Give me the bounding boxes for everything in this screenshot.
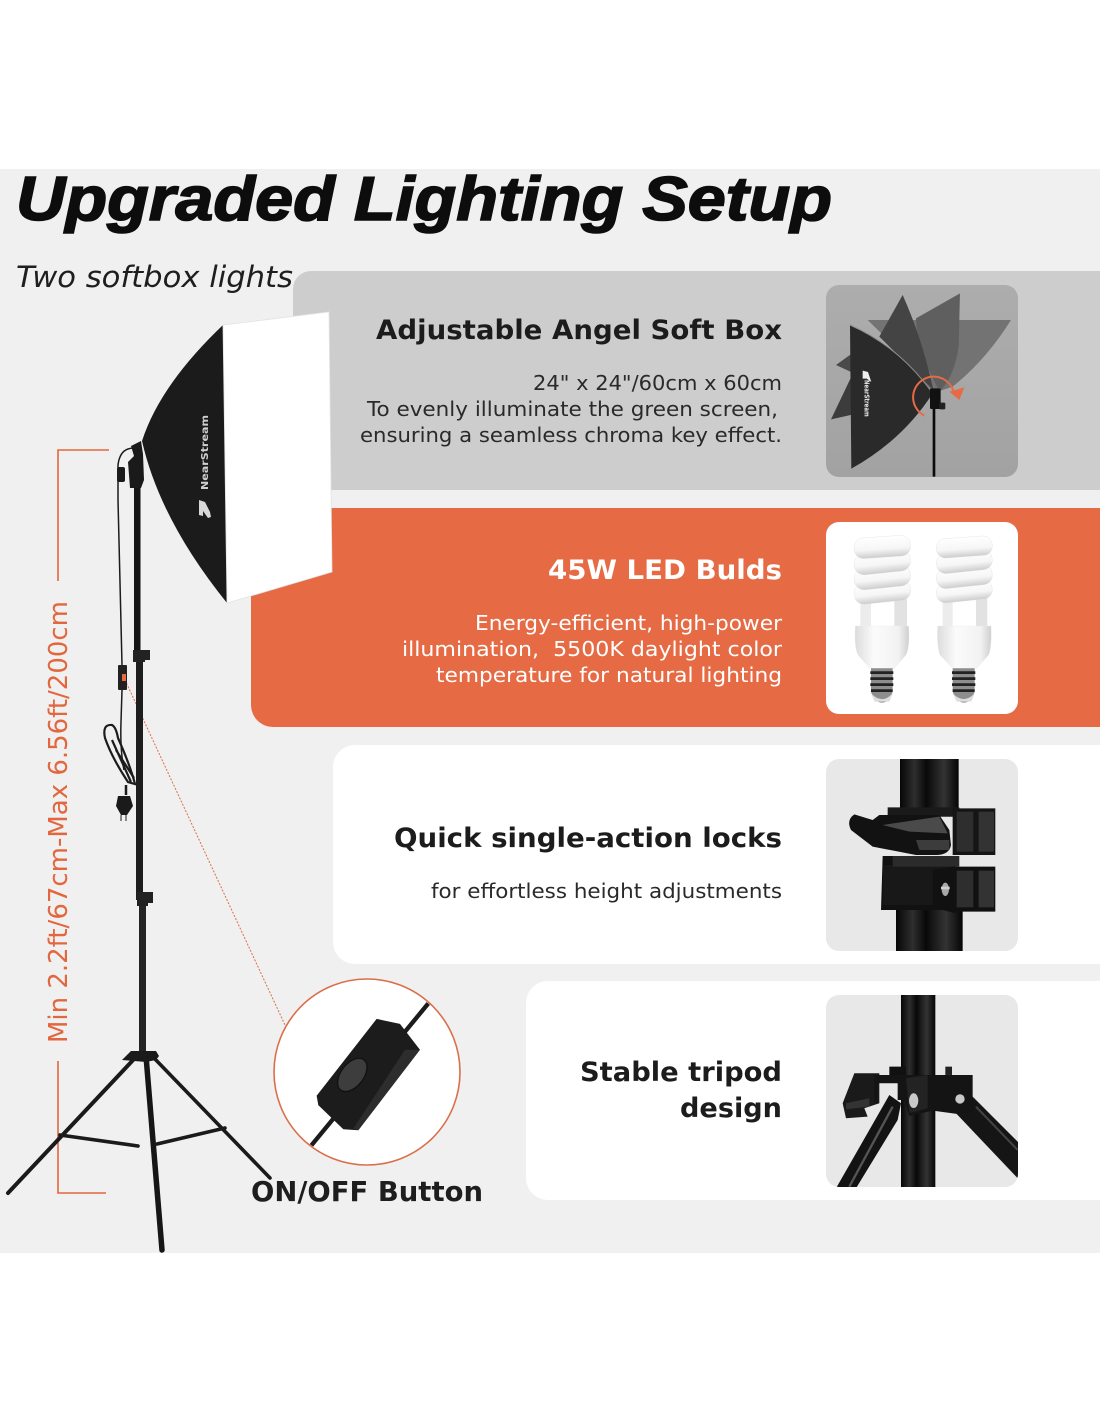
text block: bulb description bbox=[402, 611, 783, 687]
switch caption: ON/OFF Button bbox=[251, 1175, 483, 1208]
soft box bbox=[142, 312, 332, 603]
text block: soft box description: 24" x 24"/60cm x 60cm bbox=[533, 371, 782, 395]
icon: inline rocker switch bbox=[310, 1003, 428, 1147]
panel: LED bulbs bbox=[251, 508, 1100, 727]
callout: on/off switch bbox=[251, 979, 483, 1208]
heading: stable tripod: design bbox=[680, 1093, 782, 1124]
power cord and switch bbox=[104, 448, 135, 821]
icon: rotating soft box photo bbox=[826, 285, 1018, 477]
height dimension bracket bbox=[58, 450, 109, 1193]
mast bbox=[117, 441, 153, 1055]
panel: quick locks bbox=[333, 745, 1100, 964]
text block: bulb description: illumination, 5500K daylight color bbox=[402, 637, 783, 661]
tripod base bbox=[8, 1051, 270, 1250]
icon: rotating soft box photo: NearStream bbox=[862, 380, 870, 417]
panel: adjustable soft box bbox=[293, 271, 1100, 490]
heading: stable tripod bbox=[580, 1057, 782, 1124]
heading: quick locks: Quick single-action locks bbox=[394, 823, 782, 854]
panel: stable tripod bbox=[526, 981, 1100, 1200]
icon: tripod joint photo bbox=[826, 993, 1019, 1190]
text block: soft box description: To evenly illuminate the green screen, bbox=[366, 397, 778, 421]
soft box light stand bbox=[8, 312, 332, 1250]
dotted leader line bbox=[125, 680, 285, 1025]
title: Upgraded Lighting Setup bbox=[16, 165, 832, 234]
soft box: NearStream bbox=[200, 415, 211, 490]
background band bbox=[0, 169, 1100, 1253]
heading: LED bulbs: 45W LED Bulds bbox=[548, 555, 782, 586]
heading: stable tripod: Stable tripod bbox=[580, 1057, 782, 1088]
heading: adjustable soft box: Adjustable Angel Soft Box bbox=[376, 315, 782, 346]
text block: soft box description bbox=[360, 371, 782, 447]
text block: bulb description: temperature for natural lighting bbox=[436, 663, 782, 687]
icon: right bulb bbox=[935, 535, 993, 703]
icon: left bulb bbox=[853, 535, 912, 703]
icon: lock clamp photo bbox=[826, 757, 1018, 953]
text block: soft box description: ensuring a seamless chroma key effect. bbox=[360, 423, 782, 447]
height label: Min 2.2ft/67cm-Max 6.56ft/200cm bbox=[44, 601, 74, 1043]
icon: spiral bulbs photo bbox=[826, 522, 1018, 714]
text block: locks description: for effortless height adjustments bbox=[431, 879, 782, 903]
text block: bulb description: Energy-efficient, high-power bbox=[475, 611, 783, 635]
subtitle: Two softbox lights bbox=[16, 260, 293, 294]
